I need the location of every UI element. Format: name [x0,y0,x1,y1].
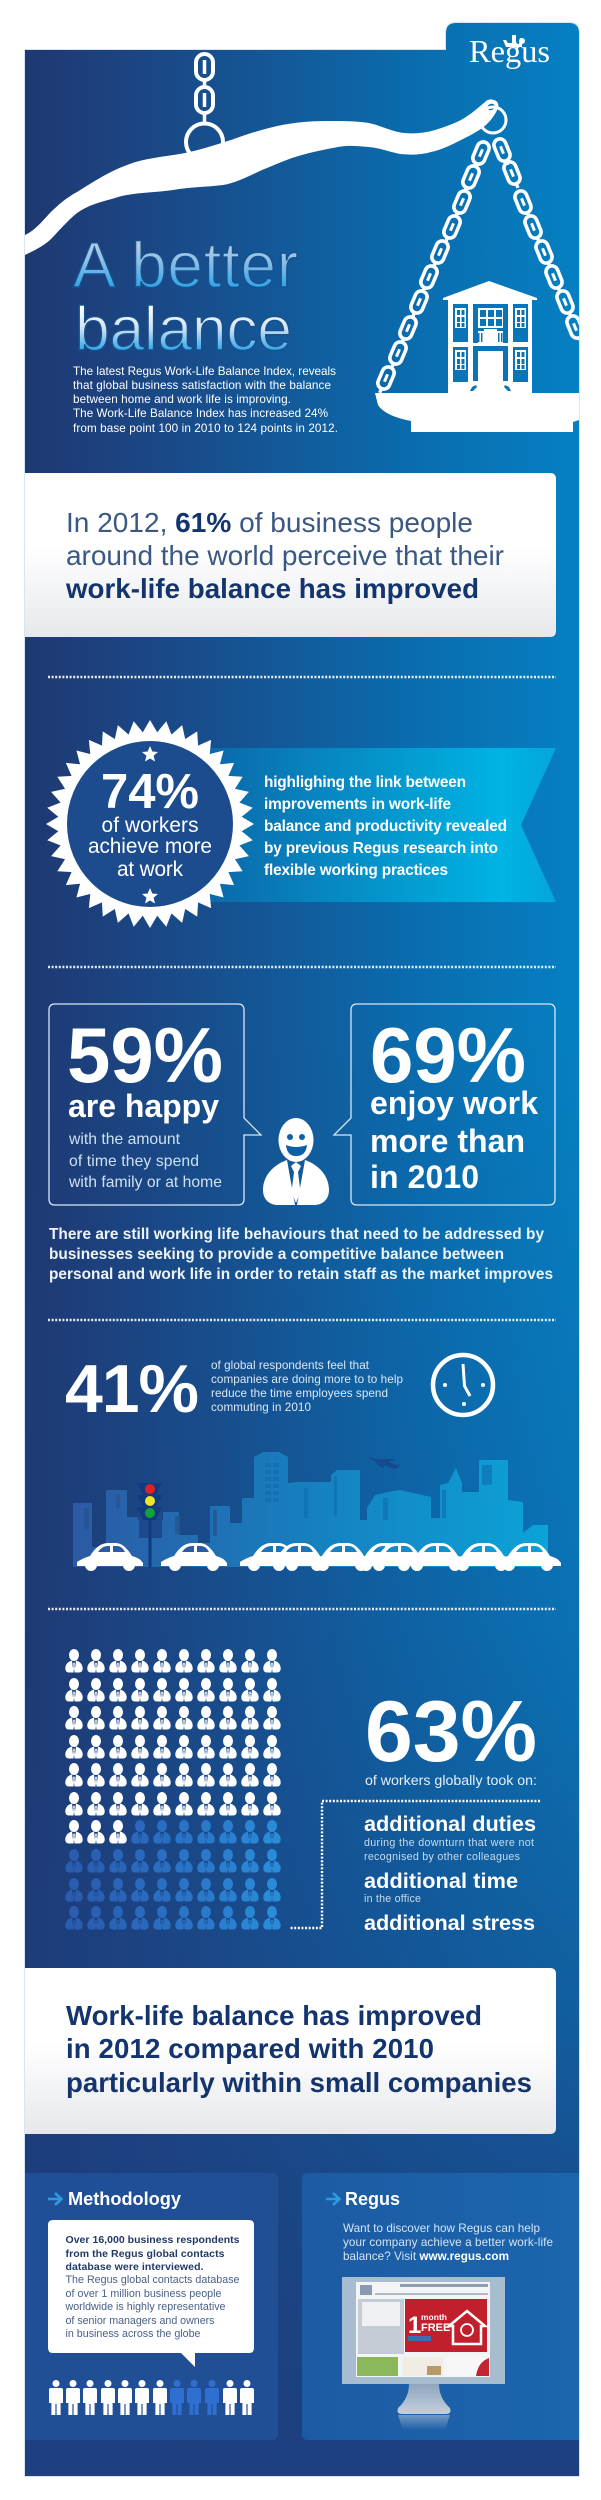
ribbon: balance and productivity revealed [264,818,507,835]
monitor: FREE [421,2322,450,2334]
divider [48,1319,556,1321]
list: additional burdens: additional time [364,1868,518,1893]
title: A better [73,229,298,301]
text: working life behaviours: personal and work life in order to retain staff as the market improves [49,1266,553,1283]
speech bubble: 69% [334,1004,555,1205]
ribbon: flexible working practices [264,862,448,879]
title: balance [75,294,292,364]
panel: methodology [25,2173,278,2440]
traffic light [137,1483,162,1568]
pan [375,393,579,432]
arrow [48,2193,62,2205]
callout: 61% improved: In 2012, 61% of business people [66,507,473,538]
intro text: The latest Regus Work-Life Balance Index, reveals [73,365,336,378]
stat: 41%: reduce the time employees spend [211,1387,388,1400]
cars [77,1543,561,1571]
list: additional burdens: during the downturn that were not [364,1837,534,1849]
panel: methodology: from the Regus global contacts [66,2248,225,2260]
panel: Regus: Regus [345,2189,400,2209]
list: additional burdens: in the office [364,1893,421,1905]
logo: Regus: Regus [469,33,550,69]
callout: small companies [25,1968,556,2134]
list: additional burdens: additional duties [364,1811,536,1836]
intro text: that global business satisfaction with the balance [73,379,331,392]
beam ring [480,107,506,133]
callout: small companies: in 2012 compared with 2010 [66,2033,434,2064]
panel: methodology: of over 1 million business people [66,2288,222,2300]
panel: methodology: Over 16,000 business respondents [66,2234,240,2246]
speech bubble: 59%: are happy [68,1088,219,1124]
panel: Regus [302,2173,579,2440]
stat: 41%: companies are doing more to to help [211,1373,403,1386]
right chain [492,137,587,344]
ribbon: highlighing the link between [264,774,466,791]
panel: methodology: worldwide is highly representative [64,2301,226,2313]
scale: hanging beam with chains and pan [25,54,587,432]
intro text: between home and work life is improving. [73,393,291,406]
plane [367,1456,400,1469]
pictogram: 100 workers, 63 white [65,1649,281,1930]
panel: Regus: Want to discover how Regus can help [343,2222,540,2235]
badge: 74%: achieve more [88,835,212,858]
divider [48,966,556,968]
badge: 74%: at work [117,858,184,881]
stat: 41%: of global respondents feel that [211,1359,370,1372]
stat: 63%: 63% [365,1684,537,1780]
text: working life behaviours: There are still working life behaviours that need to be addressed by [49,1226,544,1243]
speech bubble: 59%: with family or at home [68,1174,222,1191]
left chain [374,140,491,395]
divider [48,676,556,678]
callout: small companies: particularly within small companies [66,2067,532,2098]
speech bubble: 59% [49,1004,261,1205]
monitor: month [421,2312,447,2322]
list: additional burdens: additional stress [364,1910,535,1935]
speech bubble: 69%: enjoy work [370,1085,538,1121]
speech bubble: 69%: more than [370,1123,525,1159]
badge: 74%: 74% [101,765,199,819]
skyline [73,1452,548,1567]
panel: methodology: The Regus global contacts database [66,2274,240,2286]
intro text: The Work-Life Balance Index has increased 24% [73,407,328,420]
speech bubble: 59%: 59% [67,1011,223,1099]
speech bubble: 59%: of time they spend [69,1153,199,1170]
house [443,281,537,394]
title [73,229,298,364]
panel: Regus: balance? Visit www.regus.com [343,2250,509,2263]
panel: methodology: of senior managers and owners [66,2315,214,2327]
speech bubble: 59%: with the amount [68,1131,181,1148]
beam [25,99,498,255]
icon: smiling businessman [263,1118,329,1205]
panel: Regus: your company achieve a better work-life [343,2236,553,2249]
arrow [326,2193,340,2205]
monitor: 1 [408,2312,421,2339]
speech bubble [48,2220,254,2367]
panel: methodology: database were interviewed. [66,2261,204,2273]
callout: 61% improved: around the world perceive that their [66,540,504,571]
stat: 63%: of workers globally took on: [365,1773,537,1789]
icon: clock [433,1355,493,1415]
text: working life behaviours [49,1226,553,1283]
panel: methodology: in business across the globe [66,2328,201,2340]
dotted connector [290,1801,540,1928]
text: working life behaviours: businesses seeking to provide a competitive balance between [49,1246,504,1263]
intro text [73,365,338,435]
ribbon [200,748,556,902]
badge: 74% [30,704,270,944]
callout: 61% improved [25,473,556,637]
stat: 41%: commuting in 2010 [211,1401,311,1414]
panel: methodology: Methodology [68,2189,182,2209]
stat: 41%: 41% [65,1351,199,1427]
badge: 74%: of workers [102,814,198,837]
city skyline with traffic [73,1452,561,1571]
list: additional burdens: recognised by other colleagues [364,1851,520,1863]
ribbon: by previous Regus research into [264,840,498,857]
monitor [342,2277,505,2430]
list: additional burdens [364,1811,536,1935]
callout: 61% improved: work-life balance has improved [65,573,479,604]
intro text: from base point 100 in 2010 to 124 points in 2012. [73,422,338,435]
divider [48,1608,556,1610]
ribbon: improvements in work-life [264,796,451,813]
top chain [186,54,223,160]
speech bubble: 69%: in 2010 [370,1159,479,1195]
stat: 41% [65,1351,403,1427]
speech bubble: 69%: 69% [370,1011,526,1099]
people row [49,2380,254,2415]
callout: small companies: Work-life balance has improved [66,2000,482,2031]
